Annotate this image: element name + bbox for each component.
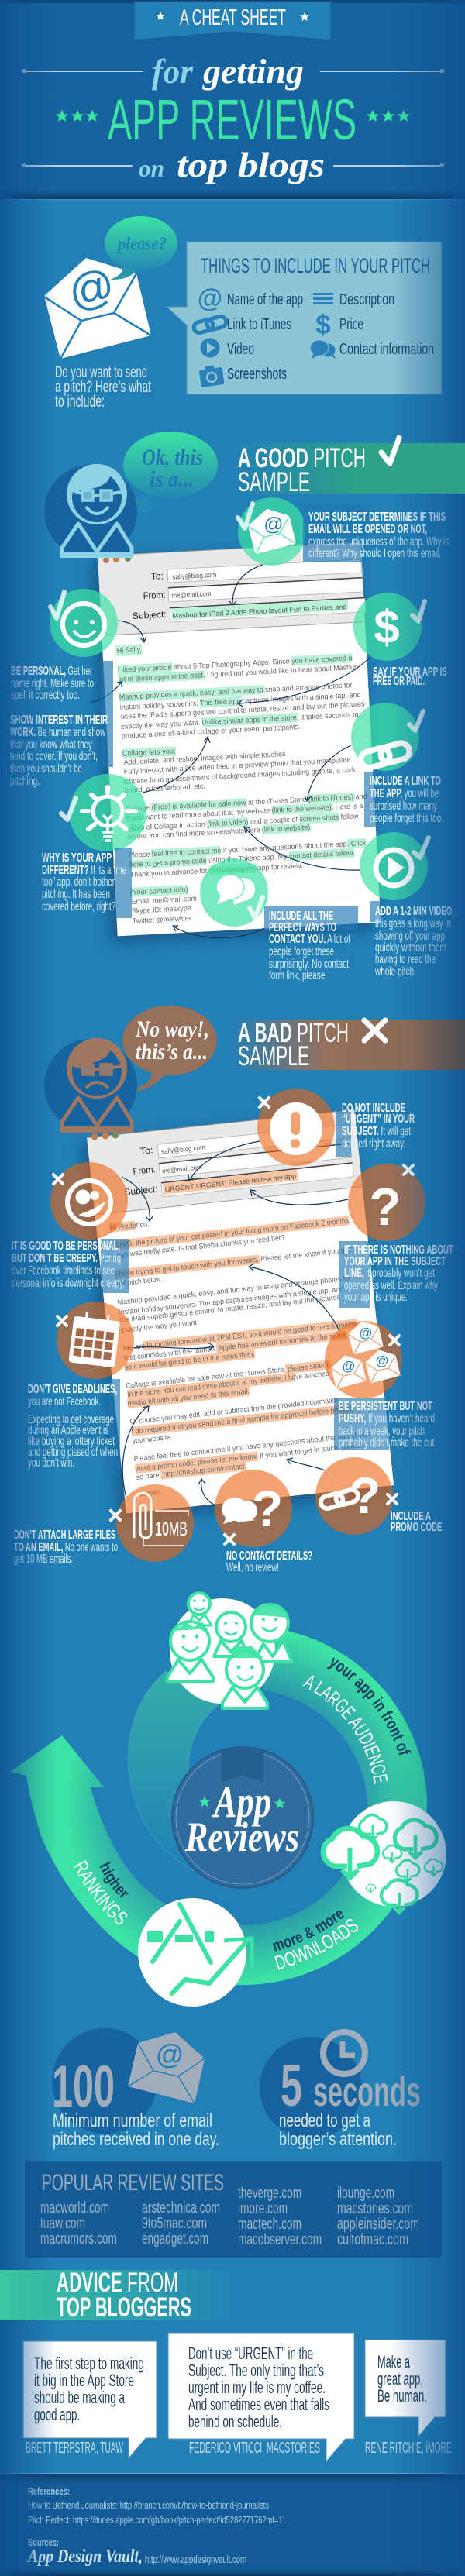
column 4: ilounge.com <box>337 2185 394 2202</box>
column 2: arstechnica.com <box>142 2199 220 2217</box>
quote: Rene Ritchie: Be human. <box>377 2386 427 2406</box>
circle icon: large attachment: 10MB <box>155 1518 188 1540</box>
callout: creepy: BUT DON’T BE CREEPY. Poring <box>12 1252 121 1265</box>
circle icon: question <box>348 1164 425 1241</box>
field labels: To: <box>140 1144 153 1157</box>
quote: Brett Terpstra <box>23 2341 157 2458</box>
Subject field: URGENT URGENT: Please review my app <box>164 1172 297 1194</box>
callout: contact details <box>269 910 350 982</box>
callout: be personal <box>11 665 94 702</box>
list item: price: $ <box>315 310 331 340</box>
email body text: media kit with all you need to this email. <box>127 1388 250 1408</box>
stat: 100 pitches: 100 <box>52 2054 115 2120</box>
intro text: to include: <box>55 393 105 411</box>
panel: popular review sites: POPULAR REVIEW SITES <box>42 2170 224 2196</box>
column 3: theverge.com <box>238 2185 301 2202</box>
stat: 5 seconds <box>260 2032 421 2150</box>
good pitch mail window <box>98 542 381 936</box>
quote: Federico Viticci: Subject. The only thing that’s <box>188 2361 324 2380</box>
column 1: macworld.com <box>40 2199 109 2217</box>
email body text: my pitch below. <box>116 1275 163 1288</box>
circle icon: video <box>360 832 429 900</box>
email body text: exactly the way you want. Unlike similar apps in the store. It takes seconds to <box>121 710 359 731</box>
quote: Brett Terpstra: BRETT TERPSTRA, TUAW <box>26 2440 123 2457</box>
footer: references and sources <box>26 2485 286 2567</box>
footer background <box>0 2473 465 2576</box>
callout: be personal: spell it correctly too. <box>11 689 80 702</box>
column 3: mactech.com <box>238 2216 301 2233</box>
callout: deadlines: and getting pissed of when <box>28 1446 118 1459</box>
bad pitch mail window <box>87 1109 394 1513</box>
column 4 <box>337 2185 419 2248</box>
From field: me@mail.com <box>162 1163 202 1175</box>
callout: large files <box>14 1529 118 1566</box>
email body text: OMG, the picture of your cat posted in your living room on Facebook 2 months <box>115 1216 350 1250</box>
callout: add a video: whole pitch. <box>374 965 416 978</box>
quote: Brett Terpstra: The first step to making <box>34 2354 144 2373</box>
icon: clock <box>323 2032 365 2074</box>
callout: show interest: that you know what they <box>10 738 92 751</box>
cycle diagram <box>10 1591 446 2007</box>
stat: 5 seconds: blogger’s attention. <box>279 2129 397 2150</box>
person: happy blogger: is a... <box>150 466 194 492</box>
callout: no contact details: Well, no review! <box>226 1561 279 1574</box>
email body text: Hi Frederico, <box>109 1220 150 1233</box>
stat: 5 seconds: 5 <box>281 2053 302 2119</box>
list item: description: Description <box>339 291 394 308</box>
callout: nothing about your app <box>344 1243 453 1304</box>
list item: name of the app <box>198 284 303 312</box>
email body text <box>109 1216 370 1499</box>
footer: references and sources: http://www.appdesignvault.com <box>145 2553 246 2565</box>
From field: me@mail.com <box>171 590 212 600</box>
panel: popular review sites <box>26 2162 441 2257</box>
arrows: good pitch <box>91 565 370 938</box>
callout: large files: TO AN EMAIL, No one wants to <box>14 1541 118 1554</box>
footer: references and sources: Sources: <box>28 2536 59 2548</box>
list item: video <box>200 338 254 358</box>
label: more and more downloads: DOWNLOADS <box>274 1918 358 1969</box>
icon: envelope with please bubble: please? <box>116 234 167 253</box>
circle icon: email subject <box>238 497 306 566</box>
footer: references and sources: References: <box>28 2485 70 2497</box>
list item: name of the app: Name of the app <box>227 291 303 308</box>
email body text: I liked your article about 5 Top Photography Apps. Since you have covered a <box>118 654 353 675</box>
callout: free or paid: FREE OR PAID. <box>373 675 425 688</box>
icon: cross <box>364 1020 385 1040</box>
callout: link to the app <box>370 775 443 825</box>
heading: advice from top bloggers <box>0 2268 240 2323</box>
quote: Federico Viticci: Don’t use “URGENT” in the <box>188 2344 313 2363</box>
From field <box>159 1143 352 1178</box>
callout: urgent: deleted right away. <box>342 1137 405 1150</box>
icon: grey envelope <box>128 2032 205 2103</box>
field labels: Subject: <box>132 609 167 621</box>
callout: deadlines: DON’T GIVE DEADLINES, <box>28 1383 117 1396</box>
circle icon: no contact details <box>215 1470 292 1547</box>
field labels: To: <box>150 570 164 582</box>
email body text: want a promo code, please let me know. If you want to get in touch, please <box>134 1441 363 1474</box>
circle icon: no contact details: ? <box>252 1480 283 1537</box>
quote: Brett Terpstra: should be making a <box>34 2388 125 2407</box>
label: your app in front of a large audience: your app in front of <box>327 1657 412 1756</box>
email body text: Twitter: @metwitter <box>133 914 191 926</box>
callout: contact details: INCLUDE ALL THE <box>269 910 333 923</box>
central badge: app reviews: Reviews <box>184 1814 299 1860</box>
email body text: Fully interact with a live video feed in a preview photo that you manipulate <box>124 756 351 776</box>
circle icon: promo code <box>315 1457 397 1535</box>
column 1: tuaw.com <box>40 2215 85 2232</box>
callout: be personal: name right. Make sure to <box>11 677 94 690</box>
callout: subject <box>308 511 449 560</box>
callout: why different: covered before, right? <box>42 900 115 913</box>
heading: good pitch sample: SAMPLE <box>238 467 310 497</box>
email body text: We are launching tomorrow at 2PM EST, so it would be good to see a review <box>122 1319 357 1353</box>
column 1: macrumors.com <box>40 2230 117 2248</box>
callout: show interest <box>10 714 108 788</box>
email body text: Collage is available for sale now at the iTunes Store, please search <box>126 1360 331 1391</box>
email body text: Choose from an assortment of background images including granite, a cork <box>124 765 356 786</box>
callout: contact details: people forget these <box>269 945 334 958</box>
label: higher rankings: RANKINGS <box>73 1860 127 1924</box>
callout: deadlines: Expecting to get coverage <box>28 1413 114 1426</box>
quote: Brett Terpstra: it big in the App Store <box>34 2371 134 2390</box>
email body text: your website. <box>132 1433 173 1446</box>
callout: persistent <box>339 1400 436 1450</box>
central badge: app reviews: App <box>212 1776 271 1827</box>
quote: Federico Viticci <box>168 2333 354 2461</box>
email body text: board, a leatherborad, etc. <box>125 782 205 795</box>
central badge: app reviews <box>172 1747 313 1888</box>
label: more and more downloads: more & more <box>273 1911 344 1952</box>
title: on <box>139 154 164 182</box>
icon: check mark <box>381 438 399 463</box>
list item: screenshots <box>198 364 287 387</box>
circle icon: email subject: @ <box>264 514 284 535</box>
column 3: macobserver.com <box>238 2231 322 2248</box>
email body text: video of Collage in action (link to video) and a couple of screen shots follow <box>128 812 359 833</box>
label: higher rankings: higher <box>99 1862 129 1898</box>
circle icon: large attachment <box>111 1484 194 1562</box>
email body text: Thanks, <box>139 1488 163 1499</box>
callout: contact details: surprisingly. No contact <box>269 958 349 971</box>
callout: urgent: “URGENT” IN YOUR <box>342 1113 415 1126</box>
email body text: If you want to read more about it at my website (link to the website). Here is a <box>126 802 363 823</box>
person: unhappy blogger: this’s a... <box>136 1039 208 1064</box>
column 4: macstories.com <box>337 2200 413 2217</box>
email body text: in the store. You can read more about it at my website. I have attached <box>127 1370 329 1399</box>
circle icon: contact bubbles <box>200 858 268 927</box>
banner: a cheat sheet: A CHEAT SHEET <box>180 5 286 30</box>
callout: why different: DIFFERENT? If its a “me <box>42 864 126 877</box>
panel: things to include in your pitch <box>167 242 442 394</box>
email body text: uses the iPad’s superb gesture control to rotate, resize, and lay out the pictures <box>121 700 365 721</box>
callout: show interest: WORK. Be human and show <box>10 726 105 739</box>
email body text: below. You can find more screenshots here (link to website). <box>128 824 312 841</box>
callout: large files: get 10 MB emails. <box>14 1553 73 1566</box>
email body text: Collage lets you: <box>122 747 176 758</box>
circle icon: promo code: ? <box>350 1467 381 1524</box>
stat: 5 seconds: needed to get a <box>279 2110 370 2131</box>
person: happy blogger: Ok, this <box>142 445 203 470</box>
email body text: instant holiday souvenirs. This free app captures images with a single tap, and <box>120 691 361 712</box>
column 2 <box>142 2199 220 2248</box>
email body text: I have trying to get in touch with you for weeks. Please let me know if you got <box>115 1246 351 1279</box>
email body text: I do required that you send me a final sample for approval before posting <box>131 1405 353 1436</box>
quote: Rene Ritchie: Make a <box>377 2352 410 2371</box>
email body text: the iPad superb gesture control to rotate, resize, and lay out the pictures <box>119 1293 341 1325</box>
callout: why different: too” app, don’t bother <box>42 875 115 889</box>
callout: promo code: INCLUDE A <box>391 1510 431 1523</box>
email body text: that coincides with the launch. Apple has an event tomorrow at the same <box>123 1331 347 1363</box>
label: your app in front of a large audience: A LARGE AUDIENCE <box>302 1675 388 1783</box>
list item: link to iTunes: Link to iTunes <box>227 316 291 333</box>
heading: bad pitch sample: A BAD PITCH <box>238 1018 349 1048</box>
circle icon: calendar <box>57 1302 134 1379</box>
stat: 100 pitches <box>52 2028 219 2150</box>
email body text: Email: me@mail.com <box>132 895 197 906</box>
list item: name of the app: @ <box>198 284 222 312</box>
intro text: a pitch? Here’s what <box>55 378 151 396</box>
callout: show interest: tend to cover. If you don’t, <box>10 750 98 763</box>
callout: urgent <box>342 1102 415 1150</box>
column 4: appleinsider.com <box>337 2216 419 2233</box>
column 2: 9to5mac.com <box>142 2215 207 2232</box>
email body text: instant holiday souvenirs. The app captures images with a single tap, and <box>119 1285 344 1317</box>
circle icon: price <box>353 593 425 661</box>
email body text: Mashup provided a quick, easy, and fun way to snap and arrange photos for <box>117 1274 352 1307</box>
From field <box>168 577 363 602</box>
list item: contact information <box>310 340 434 359</box>
heading: bad pitch sample: SAMPLE <box>238 1041 309 1071</box>
callout: urgent: DO NOT INCLUDE <box>342 1102 405 1115</box>
email body text: Please feel free to contact me if you have any questions about the app. If you <box>133 1430 370 1463</box>
heading: good pitch sample: A GOOD PITCH <box>238 443 366 473</box>
footer: references and sources: App Design Vault, <box>26 2547 143 2567</box>
title: for <box>152 53 194 91</box>
callout: show interest: pitching. <box>10 775 40 788</box>
email body text: (Your contact info) <box>130 886 188 897</box>
inner faded spiral band <box>128 1671 219 1871</box>
circle icon: creepy smile <box>50 1162 128 1240</box>
To field <box>157 1124 350 1158</box>
email body text: Hi Sally, <box>117 645 142 655</box>
quote: Federico Viticci: And sometimes even that falls <box>188 2395 329 2414</box>
heading: bad pitch sample <box>231 1018 465 1071</box>
callout: no contact details: NO CONTACT DETAILS? <box>226 1549 312 1563</box>
circle: audience of people <box>167 1593 292 1708</box>
circle: downloads clouds <box>323 1801 446 1913</box>
Subject field <box>161 1162 354 1197</box>
field labels: From: <box>143 589 166 601</box>
field labels <box>132 570 167 621</box>
icon: grey envelope: @ <box>156 2038 184 2070</box>
circle icon: price: $ <box>374 601 400 653</box>
footer: references and sources: How to Befriend Journalists: http://branch.com/b/how-to-befriend-journalists <box>28 2499 269 2511</box>
callout: show interest: then you shouldn’t be <box>10 762 82 776</box>
To field: sally@blog.com <box>161 1144 205 1155</box>
callout: why different: WHY IS YOUR APP <box>42 851 112 865</box>
callout: urgent: SUBJECT. It will get <box>342 1125 411 1138</box>
email body text: lot of these apps in the past. I figured out you would like to hear about Mashup. <box>119 663 360 684</box>
person: unhappy blogger: No way!, <box>135 1016 209 1042</box>
circle icon: lightbulb <box>61 774 146 851</box>
column 3: imore.com <box>238 2200 288 2217</box>
person: unhappy blogger <box>44 1006 217 1133</box>
callout: creepy: personal info is downright creepy. <box>12 1277 125 1290</box>
field labels: Subject: <box>124 1184 158 1198</box>
heading: advice from top bloggers: ADVICE FROM <box>57 2268 178 2298</box>
banner: a cheat sheet <box>134 2 331 40</box>
callout: show interest: SHOW INTEREST IN THEIR <box>10 714 108 727</box>
Subject field <box>170 597 366 622</box>
column 2: engadget.com <box>142 2230 208 2248</box>
callout: creepy <box>12 1240 125 1290</box>
email body text: produce a one-of-a-kind collage of your event participants. <box>122 723 301 741</box>
email body text: Add, delete, and reshoot images with simple touches <box>124 750 286 767</box>
heading: advice from top bloggers: TOP BLOGGERS <box>57 2292 191 2323</box>
callout: large files: DON’T ATTACH LARGE FILES <box>14 1529 115 1542</box>
callout: why different: pitching. It has been <box>42 888 110 901</box>
callout: contact details: CONTACT YOU. A lot of <box>269 933 350 946</box>
main spiral arrow band <box>10 1631 427 1985</box>
email body text: Skype ID: meskype <box>132 904 191 916</box>
callout: deadlines: like buying a lottery ticket <box>28 1435 115 1448</box>
field labels: From: <box>133 1164 156 1177</box>
email body text: Collage (Free) is available for sale now at the iTunes Store (link to iTunes) and <box>126 793 367 813</box>
email body text: so here: http://mashup.com/contact. <box>136 1462 247 1482</box>
email body text: Please feel free to contact me if you have any questions about the app. Click <box>129 839 367 860</box>
callout: nothing about your app: your app is unique. <box>344 1291 408 1304</box>
callout: free or paid <box>373 665 447 688</box>
overlay boxes: good pitch <box>101 504 385 930</box>
circle icon: many emails <box>325 1321 402 1398</box>
quote: Federico Viticci: behind on schedule. <box>188 2412 282 2431</box>
email body text: here to get a promo code using the Tokens app. My contact details follow. <box>129 849 355 869</box>
callout: deadlines: during an Apple event is <box>28 1424 108 1437</box>
callout: link to the app: THE APP, you will be <box>370 787 439 800</box>
stat: 100 pitches: pitches received in one day. <box>53 2129 219 2150</box>
column 3 <box>238 2185 322 2248</box>
email body text: so it would be good to be in the news then. <box>124 1350 255 1372</box>
callout: deadlines <box>28 1383 118 1470</box>
icon: envelope with please bubble: @ <box>64 259 120 318</box>
list item: video: Video <box>227 341 254 358</box>
quote: Rene Ritchie: great app, <box>377 2369 423 2389</box>
quote: Brett Terpstra: good app. <box>34 2405 80 2424</box>
heading: good pitch sample <box>231 438 465 497</box>
callout: be personal: BE PERSONAL, Get her <box>11 665 92 678</box>
callouts: bad pitch <box>12 1102 453 1574</box>
callout: promo code <box>391 1510 444 1534</box>
callout: creepy: IT IS GOOD TO BE PERSONAL, <box>12 1240 120 1253</box>
callout: contact details: form link, please! <box>269 969 327 982</box>
callout: contact details: PERFECT WAYS TO <box>269 921 336 934</box>
callout: deadlines: you don’t win. <box>28 1457 74 1470</box>
circle icon: many emails: @ <box>342 1359 356 1374</box>
callout: deadlines: you are not Facebook. <box>28 1395 101 1408</box>
quote: Federico Viticci: FEDERICO VITICCI, MACSTORIES <box>189 2440 320 2457</box>
callouts: good pitch <box>10 511 454 982</box>
column 1 <box>40 2199 117 2248</box>
intro text: Do you want to send <box>55 363 147 381</box>
To field: sally@blog.com <box>172 571 217 581</box>
footer: references and sources: Pitch Perfect: https://itunes.apple.com/gb/book/pitch-perfect/id528277176?mt=11 <box>28 2514 286 2526</box>
circle icon: urgent <box>257 1089 335 1166</box>
arrows: bad pitch <box>122 1141 348 1505</box>
email body text: Of course you may edit, add or subtract from the provided information <box>129 1396 340 1426</box>
list item: screenshots: Screenshots <box>227 366 287 383</box>
callout: add a video <box>374 905 454 978</box>
list item: description <box>313 291 394 308</box>
column 4: cultofmac.com <box>337 2231 408 2248</box>
quote: Federico Viticci: urgent in my life is my coffee. <box>188 2378 326 2397</box>
field labels <box>124 1144 158 1198</box>
circle icon: smile <box>50 589 118 657</box>
intro text <box>55 363 151 411</box>
circle icon: question: ? <box>369 1178 401 1236</box>
list item: link to iTunes <box>193 315 291 334</box>
email body text: ago was really cute. Is that Sheba chunks you feed her? <box>116 1233 285 1260</box>
callout: creepy: over Facebook timelines to see <box>12 1264 115 1278</box>
quote: Rene Ritchie <box>365 2340 452 2457</box>
email body text: Thank you in advance for considering my app for review. <box>130 862 303 879</box>
email body text: Mashup provides a quick, easy, and fun way to snap and arrange photos for <box>119 681 353 702</box>
list item: price: Price <box>339 316 363 333</box>
Subject field: Mashup for iPad 2 Adds Photo layout Fun to Parties and <box>172 603 346 620</box>
title: top blogs <box>177 145 325 184</box>
circle icon: link <box>351 703 423 771</box>
callout: no contact details <box>226 1549 312 1574</box>
icon: envelope with please bubble <box>44 216 177 359</box>
circle: app store rankings <box>138 1898 252 2007</box>
To field <box>167 559 362 583</box>
callout: why different <box>42 851 126 913</box>
title: getting <box>202 53 304 91</box>
circle icon: many emails: @ <box>359 1326 373 1340</box>
list item: price <box>315 310 363 340</box>
email body text: exactly the way you want. <box>120 1318 199 1335</box>
circle icon: many emails: @ <box>375 1353 389 1368</box>
stat: 100 pitches: Minimum number of email <box>53 2110 212 2131</box>
email body text <box>115 644 367 926</box>
title <box>22 53 444 184</box>
header background <box>0 0 465 200</box>
overlay boxes: bad pitch <box>101 1104 389 1472</box>
person: happy blogger <box>44 432 218 558</box>
